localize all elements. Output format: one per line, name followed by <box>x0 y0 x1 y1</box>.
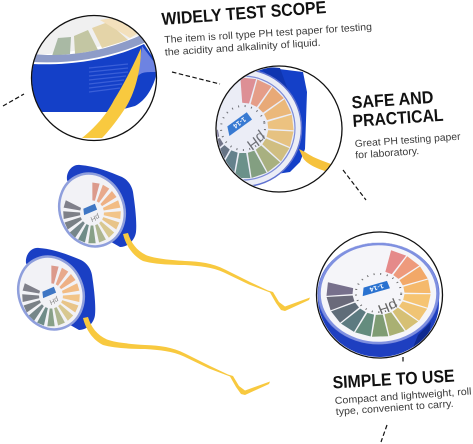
dashed connector lines <box>3 72 403 442</box>
panel: magnified dial circle <box>215 65 343 193</box>
title: widely test scope: The item is roll type PH test paper for testing <box>164 22 372 46</box>
panel: magnified strip outlet circle <box>30 14 160 144</box>
title: widely test scope <box>161 0 372 58</box>
heading: simple to use: Compact and lightweight, roll <box>334 386 472 407</box>
icon: blue base <box>26 248 95 330</box>
icon: yellow strip in dial circle <box>299 149 331 171</box>
heading: safe and practical: for laboratory. <box>355 146 420 161</box>
panel: magnified top-down dial circle <box>316 232 443 359</box>
product: upper roll <box>48 164 310 311</box>
product: lower roll <box>7 247 270 395</box>
icon: strip <box>123 233 310 311</box>
heading: simple to use <box>332 366 472 418</box>
heading: simple to use: SIMPLE TO USE <box>332 366 455 392</box>
icon: dial <box>7 247 95 339</box>
icon: yellow strip in magnified circle <box>82 48 141 138</box>
icon: blue base <box>67 165 136 247</box>
icon: strip <box>83 317 270 395</box>
icon: dial <box>48 164 136 256</box>
heading: safe and practical: SAFE AND <box>351 87 434 112</box>
heading: safe and practical: PRACTICAL <box>352 105 444 131</box>
heading: safe and practical: Great PH testing paper <box>354 132 462 150</box>
title: widely test scope: the acidity and alkalinity of liquid. <box>164 38 321 58</box>
heading: safe and practical <box>351 87 462 161</box>
heading: simple to use: type, convenient to carry. <box>335 399 454 418</box>
